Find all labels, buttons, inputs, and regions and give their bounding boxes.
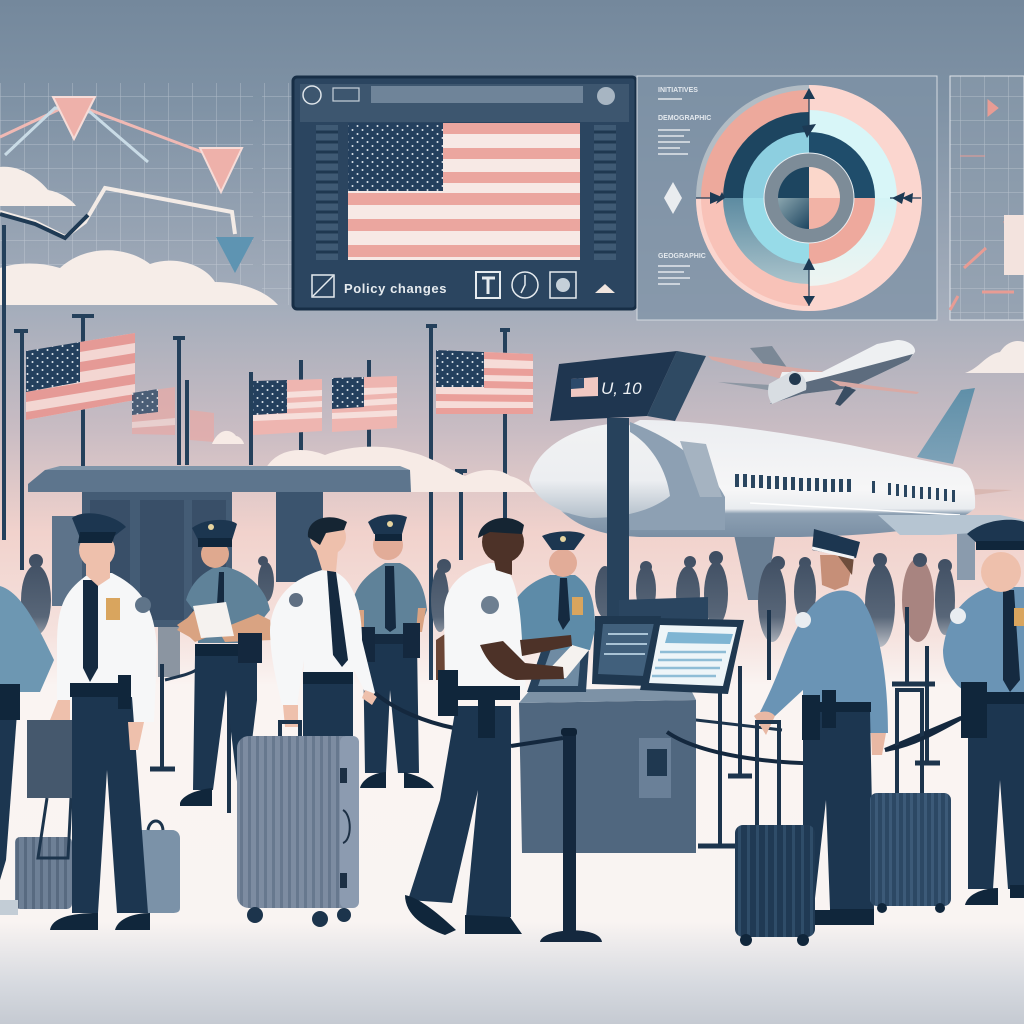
officer: far right [943, 520, 1024, 905]
cloud right [965, 341, 1024, 373]
distant crowd [21, 551, 955, 647]
suitcases left [15, 720, 180, 913]
officer: right back to viewer [754, 529, 888, 925]
stanchions and ropes back [150, 607, 940, 846]
officer: far left cropped [0, 586, 54, 915]
radial chart panel [637, 76, 937, 320]
airplane in flight [708, 340, 919, 406]
suitcase: black front [735, 722, 815, 946]
front stanchion [511, 728, 602, 942]
rope: right of kiosk [667, 718, 961, 763]
suitcase: large grey [237, 722, 359, 927]
officer: back center behind kiosk [511, 531, 595, 650]
panel labels: DEMOGRAPHIC [658, 115, 711, 122]
officer: center examining documents [405, 518, 589, 935]
parked airplane [529, 388, 1024, 600]
dashboard panel: policy changes [293, 77, 636, 309]
right grid panel [950, 76, 1024, 320]
officer: back right with blue shirt [352, 514, 434, 788]
distant clouds [212, 431, 535, 492]
sign: U, 10 [550, 351, 706, 618]
panel labels [658, 87, 711, 284]
flag 4 [332, 376, 397, 432]
sign: U, 10: U, 10 [601, 379, 642, 398]
side bars [316, 125, 616, 260]
kiosk [519, 597, 744, 853]
clouds left [0, 167, 278, 305]
rope: far right segment [885, 716, 965, 750]
radial chart [696, 85, 922, 311]
label: policy changes: Policy changes [344, 281, 447, 296]
flag 2 [132, 387, 214, 442]
panel labels: INITIATIVES [658, 87, 698, 94]
flag 5 [436, 350, 533, 414]
suitcase: dark right [870, 690, 951, 913]
officer: white shirt with tie [270, 517, 378, 740]
icon: american flag [348, 123, 580, 260]
flag 1 [26, 333, 135, 420]
panel labels: GEOGRAPHIC [658, 253, 706, 260]
flags and poles [4, 225, 533, 680]
checkpoint canopy [28, 466, 411, 677]
screens [527, 616, 744, 694]
officer: second back reading paper [177, 520, 272, 806]
flag 3 [253, 379, 322, 435]
officer: front-left white shirt [50, 513, 157, 930]
rope: left of center officer [375, 693, 454, 728]
line chart panel [0, 83, 302, 305]
flag poles [4, 225, 510, 680]
